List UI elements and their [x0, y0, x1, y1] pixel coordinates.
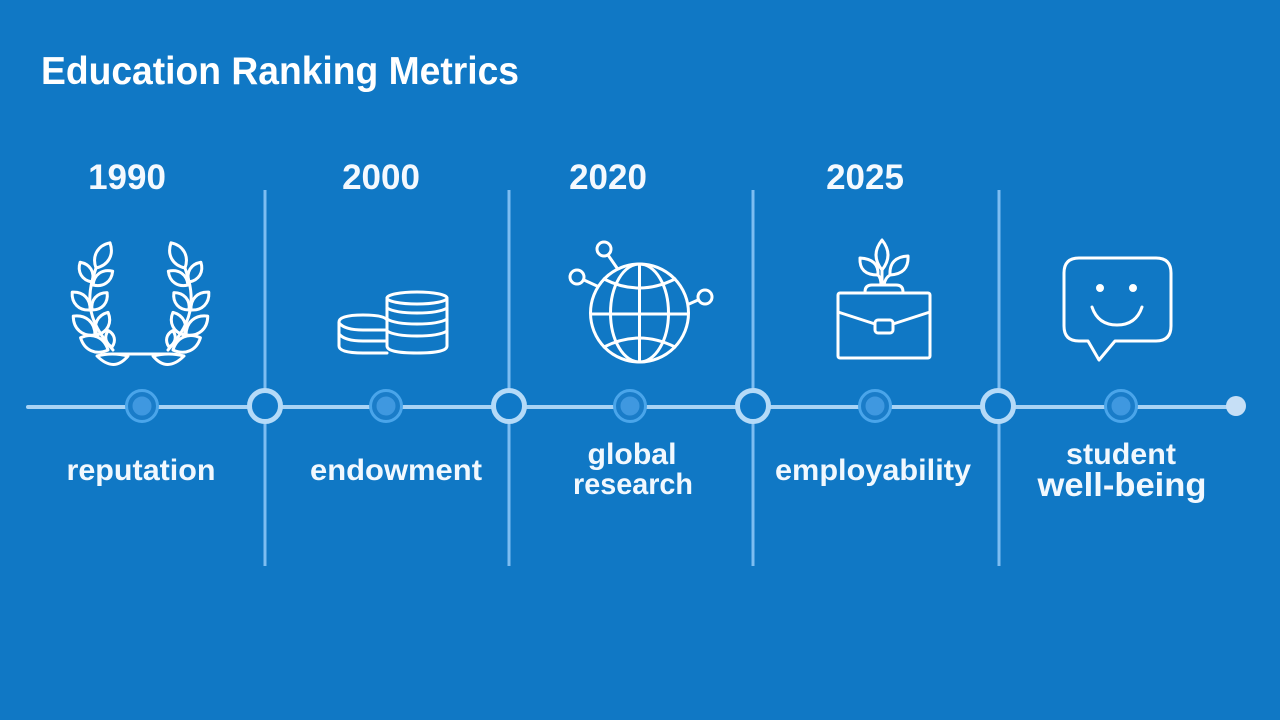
- label: student well-being: well-being: [1036, 466, 1206, 503]
- year: 1990: 1990: [88, 158, 166, 197]
- label: global research: research: [573, 468, 693, 501]
- timeline axis: [28, 390, 1246, 422]
- timeline end dot: [1226, 396, 1246, 416]
- label: reputation: reputation: [66, 454, 216, 487]
- label: employability: employability: [775, 454, 971, 487]
- year: 2000: 2000: [342, 158, 420, 197]
- title: Education Ranking Metrics: [41, 50, 519, 93]
- year: 2025: 2025: [826, 158, 904, 197]
- metric nodes: [130, 394, 1133, 418]
- icon: globe with nodes: [570, 242, 712, 362]
- icon: coin stacks: [339, 292, 447, 353]
- label: endowment: endowment: [310, 454, 482, 487]
- label: student well-being: student: [1066, 438, 1176, 471]
- label: global research: [573, 438, 693, 501]
- icon: smiling speech bubble: [1064, 258, 1171, 360]
- label: student well-being: [1036, 438, 1206, 503]
- label: global research: global: [588, 438, 676, 471]
- icon: laurel wreath: [68, 239, 213, 364]
- year: 2020: 2020: [569, 158, 647, 197]
- era divider nodes: [250, 390, 1014, 422]
- icon: briefcase with plant: [838, 240, 930, 358]
